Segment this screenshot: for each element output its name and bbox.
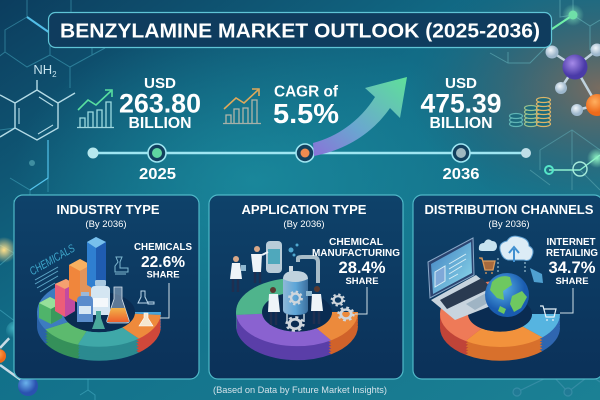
stat: 2036 market value: USD	[445, 75, 477, 92]
icon: scientist near tank	[251, 246, 268, 283]
share callout	[134, 242, 192, 280]
icon: bubbles	[288, 244, 298, 256]
icon: small bottle	[77, 292, 93, 322]
icon: reactor pipe	[298, 257, 318, 283]
timeline: 2036	[442, 166, 480, 183]
icon: reactor vessel	[283, 266, 308, 322]
donut chart: industry shares	[50, 285, 148, 353]
share callout: CHEMICAL	[329, 237, 383, 248]
share callout: SHARE	[146, 270, 180, 280]
share callout	[546, 237, 598, 287]
label: NH2: NH	[33, 62, 52, 77]
molecule: benzylamine structure	[0, 62, 75, 140]
stat: CAGR: 5.5%	[273, 98, 339, 129]
CAGR marker	[296, 144, 314, 162]
icon: orange growth chart	[223, 89, 261, 124]
molecule: right lower	[530, 130, 600, 190]
icon: cart on segment	[540, 306, 556, 321]
stat: 2025 market value: USD	[144, 75, 176, 92]
icon: orange bar	[69, 259, 91, 304]
2036 marker	[452, 144, 470, 162]
timeline: 2025	[139, 166, 176, 183]
icon: small cloud	[479, 239, 497, 251]
share callout: SHARE	[346, 276, 378, 287]
timeline	[88, 144, 531, 183]
molecule: bottom right	[513, 375, 600, 396]
share callout: SHARE	[556, 276, 588, 287]
share callout: 28.4%	[338, 259, 386, 277]
heading: APPLICATION TYPE	[242, 202, 367, 217]
2025 marker	[148, 144, 166, 162]
donut chart: distribution shares	[454, 289, 546, 353]
icon: flask outline	[138, 291, 154, 304]
source note: (Based on Data by Future Market Insights)	[213, 385, 387, 396]
molecule: left bottom nodes	[0, 160, 50, 396]
icon: lab glassware	[115, 257, 128, 274]
icon: tablet tile	[530, 268, 543, 283]
icon: large bottle	[91, 280, 110, 315]
share callout	[312, 237, 400, 287]
share callout: MANUFACTURING	[312, 248, 400, 259]
share callout: RETAILING	[546, 248, 598, 259]
share callout: CHEMICALS	[134, 242, 192, 253]
heading: DISTRIBUTION CHANNELS	[424, 202, 594, 217]
icon: gears	[287, 294, 354, 331]
title text: BENZYLAMINE MARKET OUTLOOK (2025-2036)	[60, 20, 540, 42]
stat: 2036 market value: 475.39	[420, 88, 502, 118]
share callout: INTERNET	[546, 237, 596, 248]
subheading: (By 2036)	[283, 219, 325, 230]
panel: distribution channels	[413, 195, 600, 379]
label: NH2: 2	[52, 70, 57, 79]
stat: CAGR: CAGR of	[274, 84, 339, 100]
icon: laptop	[428, 238, 506, 320]
molecule: right top	[490, 0, 600, 116]
subheading: (By 2036)	[488, 219, 530, 230]
icon: coin stacks	[510, 98, 550, 126]
panel: industry type	[14, 195, 199, 379]
icon: rising bar chart	[77, 90, 114, 128]
title banner	[48, 12, 552, 48]
icon: globe	[485, 273, 529, 317]
icon: blue bar	[87, 237, 106, 290]
icon: scientist front left	[268, 287, 280, 325]
icon: dashed connectors	[498, 258, 525, 272]
icon: green cube	[39, 297, 62, 324]
stat: 2025 market value: 263.80	[119, 88, 201, 118]
panel: application type	[209, 195, 403, 379]
share callout: 34.7%	[548, 259, 596, 277]
icon: shopping cart	[479, 258, 495, 274]
text lines	[35, 267, 58, 292]
icon: large cloud with upload arrow	[500, 236, 533, 262]
stat: CAGR	[223, 84, 339, 129]
arrow: growth	[313, 77, 407, 156]
stat: 2036 market value	[420, 75, 550, 132]
molecule network: left	[0, 0, 105, 400]
stat: 2036 market value: BILLION	[430, 115, 492, 132]
label: chemicals slanted: CHEMICALS	[28, 243, 77, 278]
icon: flask on orange segment	[139, 313, 153, 326]
heading: INDUSTRY TYPE	[56, 202, 160, 217]
icon: orange flask	[107, 287, 129, 323]
donut chart: application shares	[249, 285, 345, 353]
stat: 2025 market value: BILLION	[128, 115, 192, 132]
icon: small flask	[92, 311, 105, 329]
stat: 2025 market value	[77, 75, 201, 132]
icon: pink bar	[55, 279, 75, 317]
subheading: (By 2036)	[85, 219, 127, 230]
share callout: 22.6%	[141, 254, 185, 271]
icon: scientist left	[230, 256, 246, 292]
icon: scientist front right	[306, 286, 323, 324]
icon: storage tank	[266, 241, 282, 273]
